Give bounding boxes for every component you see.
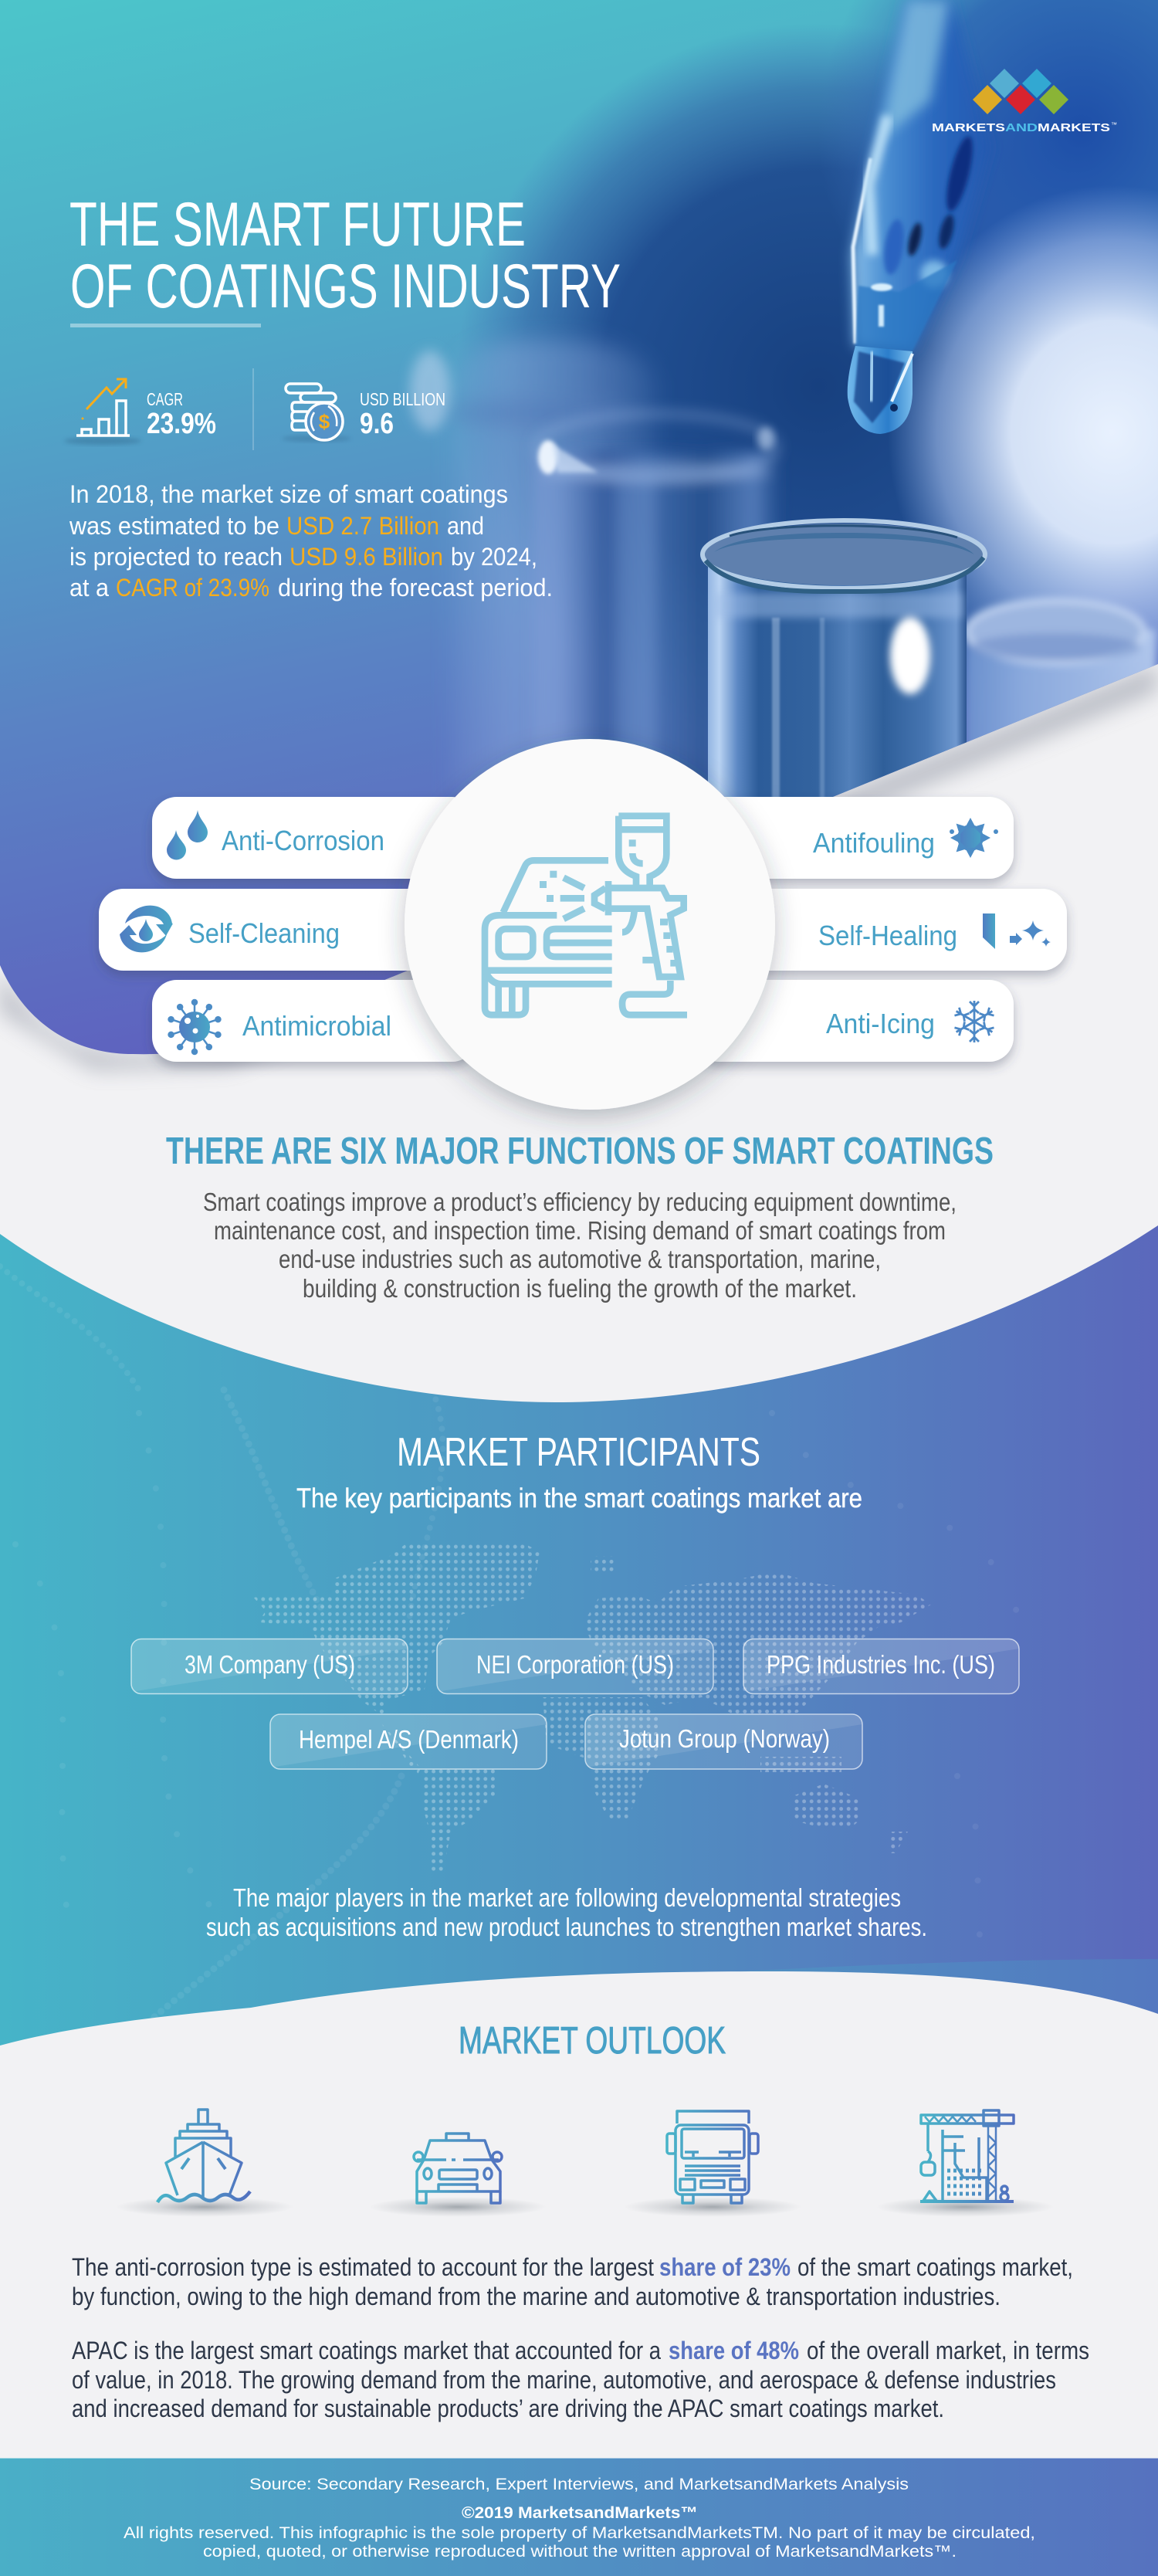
hero paragraph: by 2024,	[451, 543, 537, 571]
footer: Source: Secondary Research, Expert Interviews, and MarketsandMarkets Analysis	[249, 2476, 909, 2493]
footer: All rights reserved. This infographic is the sole property of MarketsandMarketsTM. No part of it may be circulated,	[124, 2524, 1035, 2542]
card: Antifouling: Antifouling	[813, 827, 935, 859]
title: THE SMART FUTURE	[69, 190, 526, 259]
hero photo panel: dropper and test tubes	[0, 0, 1158, 1081]
card: Anti-Icing: Anti-Icing	[826, 1008, 935, 1039]
footer: ©2019 MarketsandMarkets™	[462, 2504, 698, 2522]
footer: copied, quoted, or otherwise reproduced without the written approval of MarketsandMarkets™.	[203, 2543, 957, 2561]
panel: market participants band	[0, 1225, 1158, 2054]
participant box: PPG Industries: PPG Industries Inc. (US)	[767, 1650, 995, 1679]
hero paragraph: USD 2.7 Billion	[286, 512, 439, 540]
title underline	[70, 324, 261, 327]
participant box: Hempel: Hempel A/S (Denmark)	[299, 1725, 519, 1754]
back tube	[448, 340, 656, 803]
title: OF COATINGS INDUSTRY	[70, 252, 621, 321]
icon: splat	[950, 818, 998, 858]
functions paragraph	[203, 1188, 957, 1303]
participant box: PPG Industries	[743, 1639, 1019, 1694]
middle tube	[533, 414, 780, 815]
icon: droplets	[167, 810, 208, 860]
dropper	[848, 0, 990, 434]
functions paragraph: Smart coatings improve a product’s efficiency by reducing equipment downtime,	[203, 1188, 957, 1216]
hero paragraph: USD 9.6 Billion	[290, 543, 443, 571]
hero paragraph	[69, 480, 553, 602]
icon: snowflake	[954, 1001, 994, 1042]
icon: healing sparkles	[983, 913, 1051, 949]
icon: truck	[624, 2111, 801, 2217]
stat: USD billion: 9.6	[360, 408, 394, 440]
hero paragraph: In 2018, the market size of smart coatings	[69, 480, 508, 508]
logo: MarketsandMarkets: MARKETS	[932, 122, 1005, 134]
card: Antimicrobial	[152, 980, 476, 1062]
card: Anti-Corrosion: Anti-Corrosion	[222, 825, 384, 856]
strategies paragraph	[206, 1883, 927, 1941]
outlook paragraph: anti-corrosion share: The anti-corrosion type is estimated to account for the largest	[72, 2253, 654, 2281]
stat: USD billion: USD BILLION	[360, 389, 445, 409]
logo: MarketsandMarkets: MARKETS	[1038, 122, 1110, 134]
front tube	[703, 520, 985, 822]
stat: CAGR: 23.9%	[147, 408, 216, 440]
central circle with car spray icon	[405, 739, 775, 1110]
title	[69, 190, 621, 321]
icon: ship	[116, 2110, 293, 2217]
hero paragraph: CAGR of 23.9%	[116, 574, 269, 602]
participant box: NEI Corporation	[437, 1639, 713, 1694]
strategies paragraph: such as acquisitions and new product launches to strengthen market shares.	[206, 1913, 927, 1941]
stat: CAGR	[64, 379, 216, 445]
card: Self-Cleaning	[99, 889, 462, 971]
hero paragraph: and	[447, 512, 484, 540]
strategies paragraph: The major players in the market are following developmental strategies	[233, 1883, 901, 1912]
stat divider	[252, 368, 254, 450]
outlook paragraph: APAC share: of the overall market, in terms	[807, 2337, 1089, 2364]
participant box: NEI Corporation: NEI Corporation (US)	[476, 1650, 674, 1679]
icon: recycling water drop	[119, 906, 173, 952]
logo: MarketsandMarkets: ™	[1111, 121, 1117, 128]
participant box: Jotun: Jotun Group (Norway)	[619, 1724, 830, 1753]
stat: USD billion	[282, 384, 445, 442]
outlook paragraph: APAC share: share of 48%	[669, 2337, 799, 2364]
icon: growth chart	[64, 379, 141, 445]
footer	[0, 2458, 1158, 2576]
icon: microbe	[168, 1000, 221, 1054]
outlook paragraph: anti-corrosion share: share of 23%	[659, 2253, 791, 2281]
card: Anti-Icing	[695, 980, 1014, 1062]
icon: car and spray gun	[485, 816, 687, 1015]
hero paragraph: at a	[69, 574, 109, 602]
middle tube highlights	[410, 351, 774, 474]
hero paragraph: during the forecast period.	[278, 574, 553, 602]
heading: market outlook: MARKET OUTLOOK	[459, 2020, 726, 2062]
hero shadow	[0, 664, 1158, 1069]
participant box: Hempel	[270, 1714, 547, 1769]
icon: taxi	[369, 2134, 547, 2217]
lower light panel	[0, 1971, 1158, 2576]
outlook paragraph: APAC share	[72, 2337, 1089, 2422]
icon: coin stack: $	[319, 410, 330, 433]
stat: CAGR: CAGR	[147, 389, 183, 409]
card: Anti-Corrosion	[152, 797, 476, 879]
dotted world map	[251, 1544, 931, 1873]
participant box: Jotun	[585, 1714, 862, 1769]
dotted swirl texture	[0, 1266, 1027, 2023]
functions paragraph: end-use industries such as automotive & transportation, marine,	[279, 1245, 881, 1273]
outlook paragraph: anti-corrosion share: of the smart coatings market,	[797, 2253, 1073, 2281]
outlook paragraph: APAC share: and increased demand for sustainable products’ are driving the APAC smart coatings market.	[72, 2395, 944, 2422]
logo: MarketsandMarkets	[932, 69, 1117, 134]
card: Self-Cleaning: Self-Cleaning	[188, 917, 340, 949]
card: Antifouling	[695, 797, 1014, 879]
participant box: 3M Company	[131, 1639, 408, 1694]
hero paragraph: was estimated to be	[69, 512, 279, 540]
hero paragraph: is projected to reach	[69, 543, 283, 571]
outlook paragraph: anti-corrosion share	[72, 2253, 1073, 2310]
heading: market participants: MARKET PARTICIPANTS	[397, 1430, 760, 1475]
card: Self-Healing	[733, 889, 1067, 971]
functions paragraph: building & construction is fueling the growth of the market.	[303, 1274, 857, 1303]
outlook paragraph: anti-corrosion share: by function, owing to the high demand from the marine and automotive & transportation industries.	[72, 2283, 1001, 2310]
card: Antimicrobial: Antimicrobial	[242, 1010, 391, 1042]
icon: coin stack	[282, 384, 351, 442]
participant box: 3M Company: 3M Company (US)	[185, 1650, 355, 1679]
participants intro: The key participants in the smart coatings market are	[296, 1483, 862, 1513]
right tube	[967, 595, 1158, 743]
logo: MarketsandMarkets: AND	[1005, 122, 1038, 134]
functions paragraph: maintenance cost, and inspection time. Rising demand of smart coatings from	[214, 1216, 946, 1245]
icon: construction crane	[876, 2110, 1054, 2217]
outlook paragraph: APAC share: APAC is the largest smart coatings market that accounted for a	[72, 2337, 661, 2364]
card: Self-Healing: Self-Healing	[818, 920, 957, 951]
